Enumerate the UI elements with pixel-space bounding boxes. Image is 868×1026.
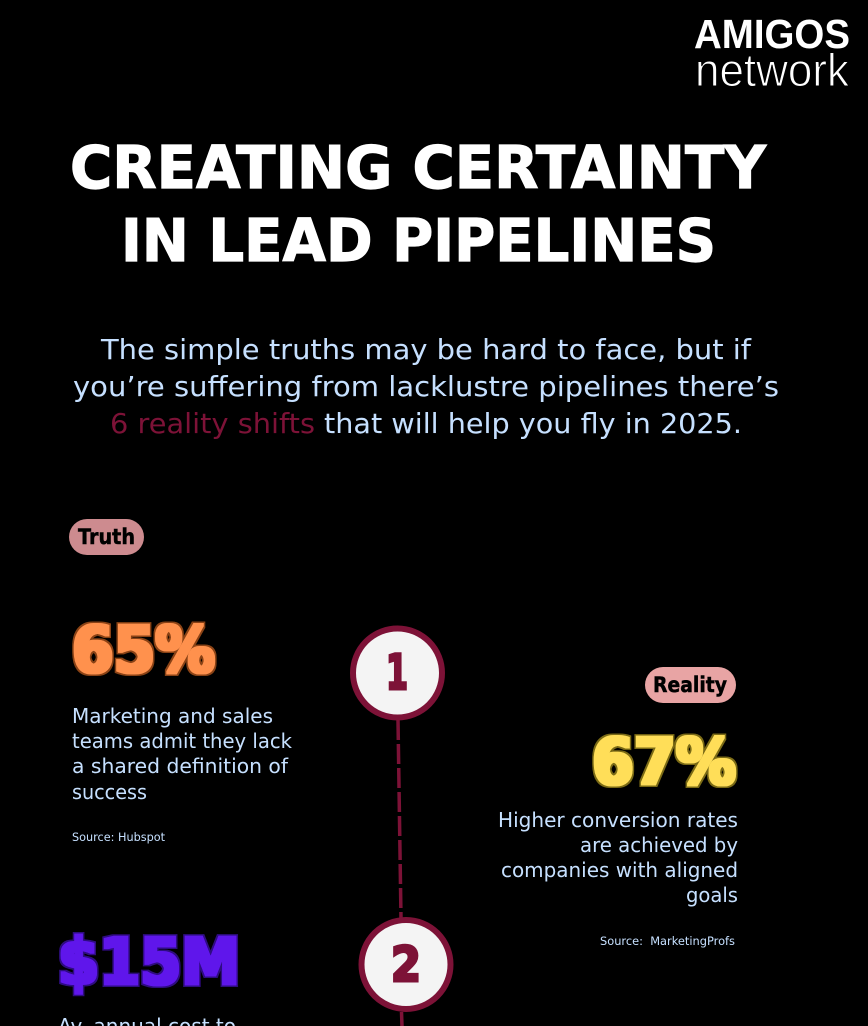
- step marker 2: [362, 920, 450, 1009]
- title: IN LEAD PIPELINES: [121, 206, 716, 275]
- title: CREATING CERTAINTY: [70, 133, 767, 202]
- timeline line continuation: [400, 1012, 404, 1026]
- truth 1 description: a shared definition of: [72, 754, 289, 778]
- title: [70, 133, 767, 275]
- truth 1 description: teams admit they lack: [72, 729, 292, 753]
- step marker 1: [353, 628, 442, 718]
- reality 1 description: goals: [686, 883, 738, 907]
- logo: Amigos Network: network: [695, 44, 850, 96]
- reality pill: [645, 667, 736, 703]
- truth 1 source: Source: Hubspot: [72, 830, 165, 844]
- stat: 67%: 67%: [592, 726, 736, 800]
- reality 1 description: [498, 808, 738, 907]
- logo: Amigos Network: AMIGOS: [694, 11, 850, 57]
- stat: 65%: 65%: [72, 614, 215, 688]
- legend pill: Truth: [69, 519, 144, 555]
- legend pill: Truth: Truth: [78, 525, 135, 549]
- intro text: that will help you fly in 2025.: [324, 407, 742, 440]
- timeline dashed line: [398, 720, 401, 918]
- panel: reality 1: [498, 667, 738, 948]
- reality pill: Reality: [653, 673, 727, 697]
- reality 1 source: Source: MarketingProfs: [600, 934, 735, 948]
- reality 1 description: companies with aligned: [501, 858, 738, 882]
- panel: truth 1: [72, 614, 292, 844]
- stat: $15M: $15M: [58, 926, 240, 1000]
- intro text: you’re suffering from lacklustre pipelines there’s: [73, 370, 779, 403]
- truth 1 description: success: [72, 780, 147, 804]
- intro text: The simple truths may be hard to face, but if: [100, 333, 752, 366]
- intro text: 6 reality shifts: [110, 407, 315, 440]
- step marker 1: 1: [386, 645, 408, 701]
- truth 1 description: [72, 704, 292, 804]
- intro text: [73, 333, 779, 440]
- truth 1 description: Marketing and sales: [72, 704, 273, 728]
- reality 1 description: are achieved by: [580, 833, 738, 857]
- logo: Amigos Network: [694, 11, 850, 96]
- panel: truth 2: [58, 926, 240, 1026]
- reality 1 description: Higher conversion rates: [498, 808, 738, 832]
- step marker 2: 2: [391, 937, 421, 993]
